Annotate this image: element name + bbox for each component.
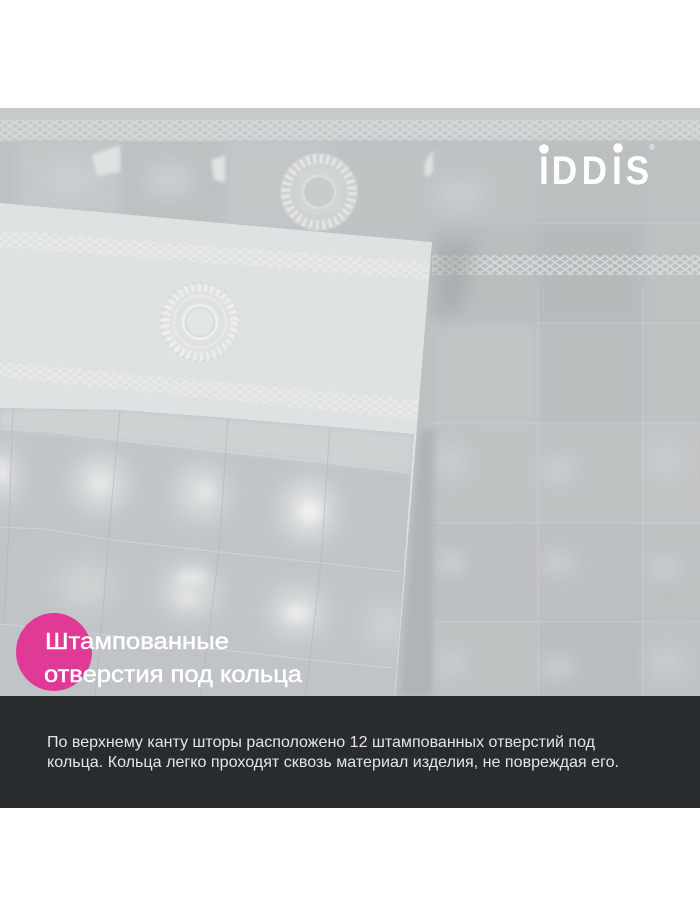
sharp highlights at top: [92, 145, 433, 182]
title: [44, 628, 302, 687]
stamped ring: front sheet: [161, 283, 239, 361]
accent: pink circle: [16, 613, 92, 691]
hem lace upper: [0, 230, 432, 280]
front folded sheet: [0, 203, 440, 700]
caption text: [47, 734, 619, 771]
photo: shower curtain: [0, 108, 700, 703]
sheet shadow on back curtain: [436, 240, 478, 320]
back curtain layer: [0, 108, 700, 703]
tile grid on sheet: [0, 429, 411, 668]
title: отверстия под кольца: [44, 661, 302, 687]
tiled lower part of sheet: [0, 400, 440, 700]
stamped ring: back curtain: [280, 153, 358, 231]
caption text: кольца. Кольца легко проходят сквозь материал изделия, не повреждая его.: [47, 754, 619, 771]
title: Штампованные: [45, 628, 229, 654]
sheet right edge light: [395, 242, 432, 696]
lower seam lace back layer: [432, 255, 700, 275]
logo: IDDIS: IDDIS: [539, 148, 649, 192]
fold shadow beside sheet: [400, 430, 434, 696]
soft tile highlights on the back layer: [150, 165, 674, 678]
dark caption band: [0, 696, 700, 808]
pale first row of tiles: [0, 408, 414, 473]
hem lace lower: [0, 362, 420, 420]
tile grid lines: [433, 223, 700, 696]
logo dots on letters i: [539, 143, 623, 154]
sheet opaque hem: [0, 203, 432, 624]
top seam lace back layer: [0, 120, 700, 140]
registered mark: ®: [649, 143, 655, 152]
caption text: По верхнему канту шторы расположено 12 штампованных отверстий под: [47, 734, 596, 751]
bright glints on tiles: [0, 458, 321, 621]
